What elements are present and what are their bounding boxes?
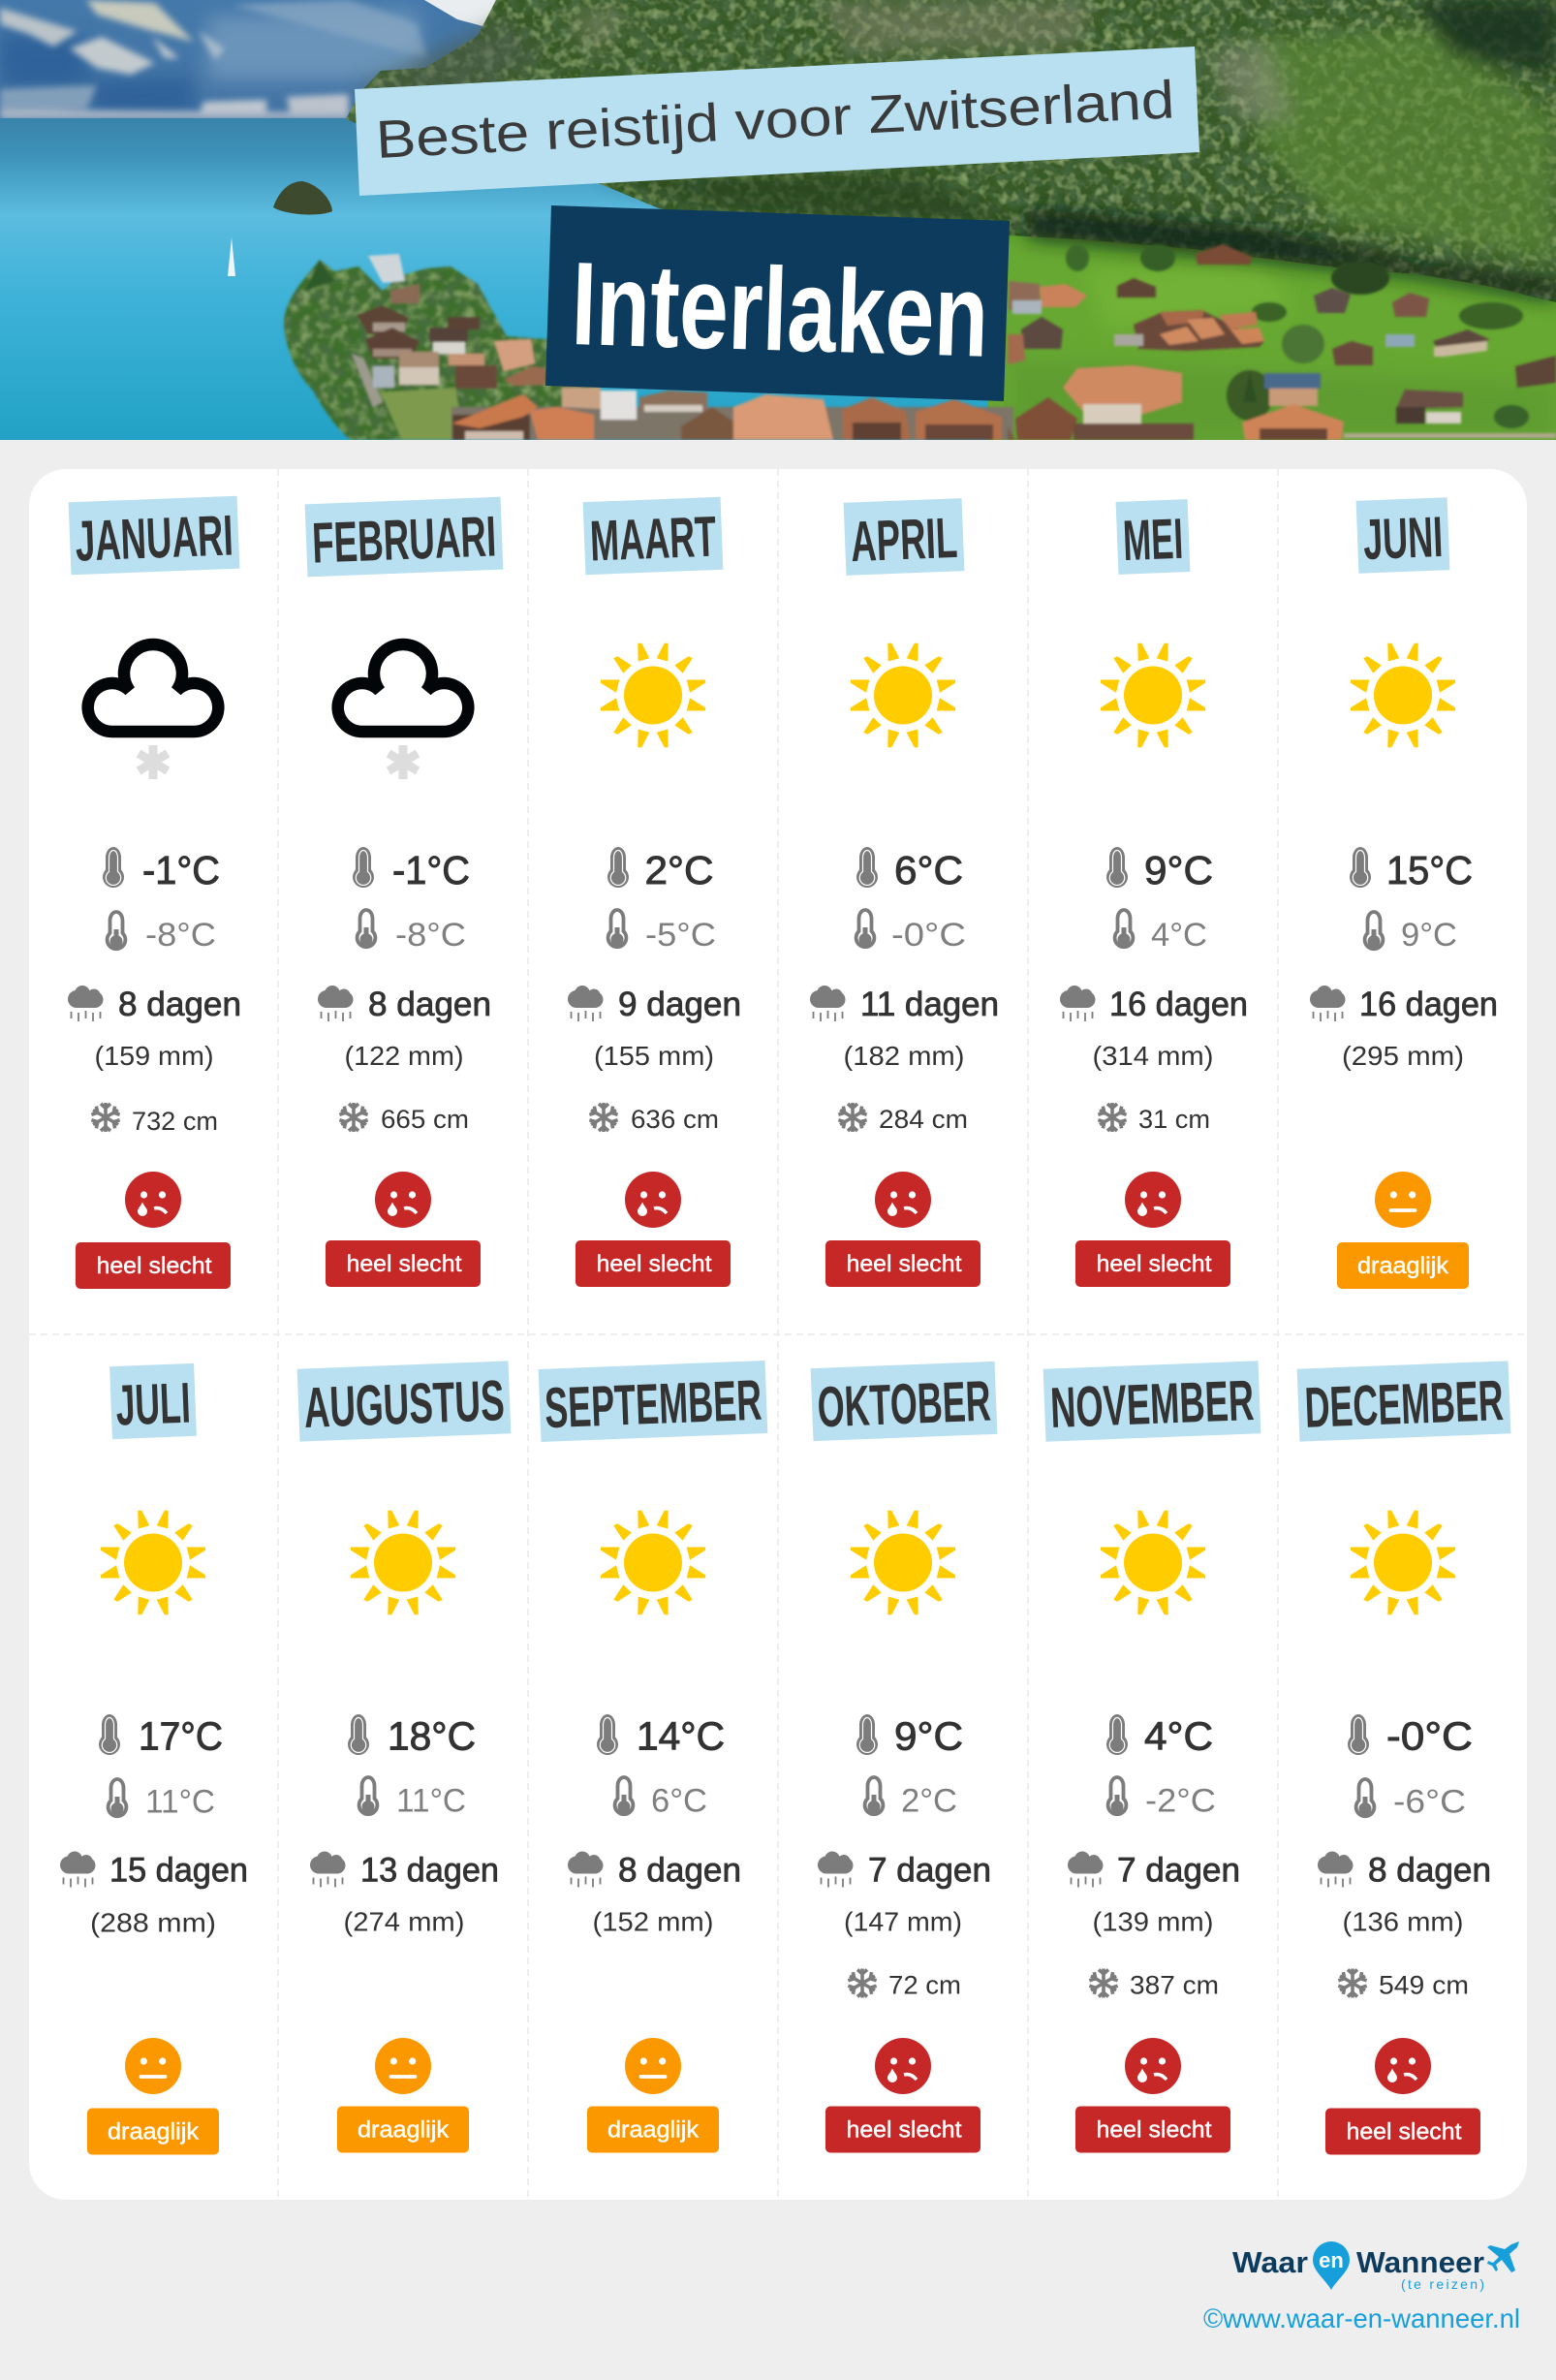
min temperature: -8°C: [145, 917, 216, 954]
rating badge: draaglijk: [607, 2116, 700, 2144]
month: januari: [68, 496, 241, 1289]
icon: thermometer high: [1350, 847, 1371, 888]
max temperature: -1°C: [142, 848, 220, 892]
heading november: [1043, 1361, 1260, 1442]
icon: sun: [601, 1511, 705, 1614]
face: very bad: [1125, 2038, 1181, 2094]
rating badge: [825, 1240, 980, 1287]
rating badge: heel slecht: [1097, 2116, 1212, 2144]
subtitle banner: Beste reistijd voor Zwitserland: Beste reistijd voor Zwitserland: [374, 69, 1176, 170]
icon: sun: [851, 643, 955, 747]
heading augustus: [297, 1361, 511, 1442]
month: september: [539, 1361, 767, 2153]
min temperature: -0°C: [891, 917, 966, 954]
month: juli: [60, 1363, 248, 2155]
month: februari: [305, 497, 503, 1287]
max temperature: 18°C: [388, 1713, 476, 1758]
icon: thermometer high: [348, 1714, 369, 1755]
min temperature: -5°C: [645, 917, 716, 954]
icon: snowflake: [1338, 1969, 1367, 1998]
min temperature: 4°C: [1151, 917, 1207, 954]
face: very bad: [625, 1172, 681, 1228]
rating badge: [326, 1240, 481, 1287]
rating badge: [1075, 2107, 1230, 2153]
title banner: Interlaken: Interlaken: [570, 237, 990, 382]
heading maart: [583, 497, 723, 575]
rain days: 8 dagen: [118, 986, 241, 1023]
rating badge: draaglijk: [108, 2118, 200, 2145]
face: very bad: [1375, 2038, 1431, 2094]
snowfall: 665 cm: [381, 1105, 469, 1134]
island: [273, 181, 332, 214]
icon: thermometer high: [1106, 847, 1128, 888]
icon: thermometer low: [1356, 1779, 1374, 1816]
min temperature: -6°C: [1393, 1783, 1466, 1820]
icon: rain: [568, 1851, 603, 1888]
rating badge: [587, 2107, 719, 2153]
logo: Waar en Wanneer: [1232, 2241, 1519, 2292]
icon: sun: [1101, 1511, 1205, 1614]
icon: thermometer high: [1106, 1714, 1128, 1755]
icon: thermometer low: [608, 910, 626, 947]
min temperature: -2°C: [1145, 1783, 1216, 1820]
heading juni: JUNI: [1362, 505, 1444, 572]
icon: snowflake: [91, 1103, 120, 1132]
heading mei: MEI: [1122, 507, 1184, 573]
rating badge: [1337, 1242, 1469, 1289]
rating badge: heel slecht: [847, 2116, 962, 2144]
icon: sun: [601, 643, 705, 747]
heading februari: [305, 497, 503, 577]
min temperature: -8°C: [395, 917, 466, 954]
heading november: NOVEMBER: [1049, 1368, 1255, 1440]
icon: thermometer low: [359, 1777, 377, 1814]
month: november: [1043, 1361, 1260, 2153]
icon: map pin: en: [1319, 2248, 1344, 2272]
rating badge: heel slecht: [1097, 1251, 1212, 1277]
precipitation: (274 mm): [343, 1907, 465, 1936]
rain days: 9 dagen: [618, 986, 741, 1023]
snowfall: 549 cm: [1379, 1971, 1469, 2000]
snowfall: 31 cm: [1138, 1105, 1210, 1134]
heading april: [844, 498, 964, 576]
heading april: APRIL: [850, 506, 958, 574]
icon: cloud with snow: [338, 644, 468, 779]
icon: thermometer high: [103, 847, 124, 888]
icon: thermometer high: [99, 1714, 120, 1755]
snowfall: 284 cm: [879, 1105, 968, 1134]
heading oktober: OKTOBER: [816, 1369, 992, 1439]
rating badge: heel slecht: [1347, 2118, 1462, 2145]
face: tolerable: [125, 2038, 181, 2094]
face: very bad: [125, 1172, 181, 1228]
heading juli: [109, 1363, 197, 1439]
snowfall: 387 cm: [1130, 1971, 1219, 2000]
max temperature: 9°C: [894, 1713, 963, 1758]
precipitation: (136 mm): [1342, 1907, 1464, 1936]
icon: rain: [568, 986, 603, 1021]
month: mei: [1060, 499, 1248, 1287]
icon: thermometer low: [108, 912, 125, 949]
icon: thermometer high: [856, 1714, 878, 1755]
month: april: [810, 498, 999, 1287]
rain days: 8 dagen: [1368, 1851, 1491, 1890]
precipitation: (147 mm): [844, 1907, 962, 1936]
icon: snowflake: [848, 1969, 877, 1998]
icon: thermometer low: [109, 1779, 126, 1816]
precipitation: (182 mm): [843, 1041, 965, 1071]
peninsula houses: [390, 284, 420, 303]
min temperature: 9°C: [1401, 917, 1457, 954]
month: juni: [1310, 497, 1498, 1289]
rating badge: heel slecht: [347, 1251, 462, 1277]
max temperature: 4°C: [1144, 1713, 1213, 1758]
icon: snowflake: [838, 1103, 867, 1132]
icon: rain: [810, 986, 845, 1021]
logo: Waar en Wanneer: (te reizen): [1401, 2276, 1484, 2292]
icon: sun: [351, 1511, 455, 1614]
heading januari: [69, 496, 239, 575]
precipitation: (288 mm): [90, 1907, 216, 1938]
month: maart: [568, 497, 741, 1287]
icon: snowflake: [1089, 1969, 1118, 1998]
icon: thermometer low: [856, 910, 874, 947]
icon: thermometer low: [1115, 910, 1133, 947]
min temperature: 11°C: [145, 1783, 215, 1820]
face: very bad: [875, 2038, 931, 2094]
icon: rain: [60, 1851, 95, 1888]
icon: thermometer high: [1348, 1714, 1369, 1755]
heading januari: JANUARI: [74, 503, 234, 574]
icon: rain: [1318, 1851, 1353, 1888]
icon: thermometer high: [353, 847, 374, 888]
website url: ©www.waar-en-wanneer.nl: [1203, 2303, 1520, 2333]
icon: thermometer low: [358, 910, 375, 947]
heading juni: [1356, 497, 1449, 574]
min temperature: 2°C: [901, 1783, 957, 1820]
snowfall: 636 cm: [631, 1105, 719, 1134]
rating badge: [1075, 1240, 1230, 1287]
heading oktober: [811, 1362, 997, 1441]
meadow houses: [1196, 244, 1252, 265]
icon: sun: [1351, 1511, 1455, 1614]
snowfall: 72 cm: [888, 1971, 961, 2000]
icon: snowflake: [1098, 1103, 1127, 1132]
rain days: 15 dagen: [109, 1851, 248, 1890]
month: december: [1297, 1361, 1510, 2155]
precipitation: (314 mm): [1092, 1041, 1214, 1071]
icon: thermometer high: [607, 847, 629, 888]
rating badge: heel slecht: [847, 1251, 962, 1277]
rating badge: heel slecht: [597, 1251, 712, 1277]
precipitation: (159 mm): [95, 1041, 213, 1071]
sailboat: [228, 237, 235, 276]
icon: thermometer low: [865, 1777, 883, 1814]
meadow: [988, 218, 1556, 440]
icon: rain: [1068, 1851, 1103, 1888]
precipitation: (155 mm): [594, 1041, 714, 1071]
icon: airplane: [1487, 2241, 1519, 2272]
meadow trees: [1227, 370, 1273, 421]
heading september: SEPTEMBER: [544, 1368, 762, 1440]
max temperature: 14°C: [637, 1713, 725, 1758]
precipitation: (139 mm): [1092, 1907, 1214, 1936]
snowfall: 732 cm: [132, 1107, 218, 1136]
icon: thermometer high: [597, 1714, 618, 1755]
logo: Waar en Wanneer: Wanneer: [1356, 2245, 1484, 2279]
min temperature: 11°C: [396, 1783, 466, 1820]
rating badge: [87, 2109, 219, 2155]
icon: rain: [310, 1851, 345, 1888]
heading februari: FEBRUARI: [311, 504, 497, 576]
precipitation: (295 mm): [1342, 1041, 1464, 1071]
max temperature: -0°C: [1386, 1713, 1473, 1758]
month: augustus: [297, 1361, 511, 2153]
face: tolerable: [1375, 1172, 1431, 1228]
face: very bad: [875, 1172, 931, 1228]
max temperature: -1°C: [392, 848, 470, 892]
title banner: Interlaken: [545, 205, 1010, 401]
rain days: 8 dagen: [618, 1851, 741, 1890]
logo: Waar en Wanneer: Waar: [1232, 2245, 1308, 2279]
icon: sun: [851, 1511, 955, 1614]
icon: rain: [318, 986, 353, 1021]
max temperature: 17°C: [139, 1713, 223, 1758]
peninsula: [284, 260, 601, 440]
face: tolerable: [375, 2038, 431, 2094]
heading augustus: AUGUSTUS: [302, 1368, 506, 1440]
heading september: [539, 1361, 767, 1442]
icon: thermometer high: [856, 847, 878, 888]
icon: snowflake: [339, 1103, 368, 1132]
rain days: 7 dagen: [1117, 1851, 1240, 1890]
rain days: 11 dagen: [860, 986, 999, 1023]
icon: rain: [68, 986, 103, 1021]
rating badge: heel slecht: [97, 1253, 212, 1279]
forest slope: [346, 0, 1556, 302]
min temperature: 6°C: [651, 1783, 707, 1820]
icon: rain: [818, 1851, 853, 1888]
rating badge: [576, 1240, 731, 1287]
hero photo: lake and village of Interlaken: [0, 0, 1556, 440]
max temperature: 6°C: [894, 848, 963, 892]
face: tolerable: [625, 2038, 681, 2094]
month: oktober: [811, 1362, 997, 2153]
icon: rain: [1310, 986, 1345, 1021]
icon: thermometer low: [1108, 1777, 1126, 1814]
rain days: 8 dagen: [368, 986, 491, 1023]
icon: rain: [1060, 986, 1095, 1021]
icon: sun: [1101, 643, 1205, 747]
village along the lake: [451, 407, 1013, 440]
precipitation: (152 mm): [592, 1907, 714, 1936]
rain days: 13 dagen: [360, 1851, 499, 1890]
face: very bad: [1125, 1172, 1181, 1228]
rating badge: draaglijk: [358, 2116, 450, 2144]
rain days: 16 dagen: [1109, 986, 1248, 1023]
icon: map pin: [1313, 2241, 1350, 2290]
max temperature: 9°C: [1144, 848, 1213, 892]
rating badge: [337, 2107, 469, 2153]
icon: sun: [101, 1511, 205, 1614]
heading maart: MAART: [589, 505, 717, 573]
heading juli: JULI: [114, 1371, 192, 1437]
panel: month calendar card: [29, 469, 1527, 2200]
icon: cloud with snow: [88, 644, 218, 779]
rating badge: [76, 1242, 231, 1289]
icon: thermometer low: [1365, 912, 1383, 949]
rain days: 7 dagen: [868, 1851, 991, 1890]
heading mei: [1116, 499, 1190, 575]
max temperature: 15°C: [1386, 848, 1473, 892]
icon: sun: [1351, 643, 1455, 747]
rating badge: draaglijk: [1357, 1253, 1449, 1279]
precipitation: (122 mm): [345, 1041, 463, 1071]
rating badge: [1325, 2109, 1480, 2155]
icon: snowflake: [589, 1103, 618, 1132]
max temperature: 2°C: [645, 848, 713, 892]
face: very bad: [375, 1172, 431, 1228]
subtitle banner: Beste reistijd voor Zwitserland: [355, 47, 1199, 196]
rain days: 16 dagen: [1359, 986, 1498, 1023]
rating badge: [825, 2107, 980, 2153]
icon: thermometer low: [615, 1777, 633, 1814]
sky patch: [424, 0, 496, 27]
